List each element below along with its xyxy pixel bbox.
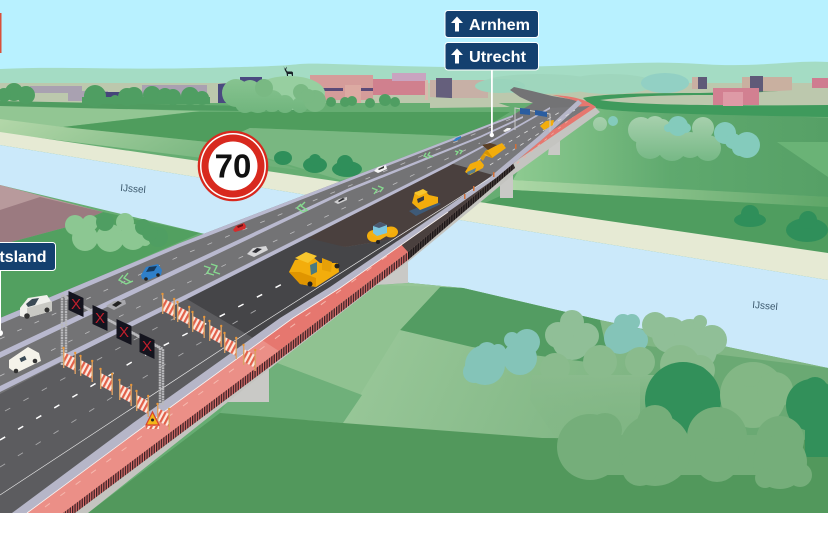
river label left: IJssel — [120, 183, 146, 196]
pale front red shoulder — [27, 340, 285, 513]
red car — [233, 223, 246, 232]
white footer — [0, 513, 828, 552]
left bank meadow — [0, 119, 300, 170]
white car far — [503, 128, 511, 132]
route sign left: tsland — [0, 249, 46, 266]
distant hills — [0, 62, 828, 110]
far lane dashes — [470, 112, 560, 165]
field under bridge light — [277, 285, 440, 395]
main lane dim dashes — [0, 305, 265, 467]
far yellow truck — [540, 120, 554, 130]
hazy far trees — [475, 73, 689, 94]
route sign Utrecht — [445, 42, 538, 70]
route sign Arnhem — [445, 10, 538, 38]
right lower field — [300, 283, 828, 513]
convertible car — [106, 300, 126, 310]
mid trees — [540, 345, 715, 385]
foreground trees — [463, 310, 828, 489]
left dark field — [63, 112, 510, 143]
front barrier row — [62, 347, 170, 430]
left background buildings — [30, 73, 428, 105]
right wedge — [777, 142, 828, 177]
route sign Arnhem: Arnhem — [469, 17, 530, 34]
hill mound — [253, 76, 325, 110]
red label edge — [0, 13, 2, 53]
route sign left — [0, 242, 56, 270]
rear barrier row — [161, 293, 256, 371]
dump truck — [482, 143, 506, 158]
milling machine — [289, 252, 340, 287]
milled brown area — [308, 163, 493, 247]
route pole left — [0, 270, 3, 336]
deer on hill — [253, 66, 325, 110]
bridge deck edge — [75, 107, 600, 513]
top lane dashes — [0, 118, 513, 339]
left mauve land — [0, 185, 200, 320]
bulldozer — [409, 189, 441, 216]
signal 3: X — [119, 324, 129, 341]
silver car — [247, 246, 268, 257]
median barrier — [0, 116, 523, 358]
green chevrons — [119, 150, 462, 284]
construction shoulder — [397, 163, 513, 252]
left tree row — [0, 83, 400, 108]
right dark meadow patch — [400, 287, 610, 365]
speed limit sign 70: 70 — [215, 148, 251, 184]
river IJssel — [0, 145, 828, 368]
route sign Utrecht: Utrecht — [469, 49, 527, 66]
thin edge line — [0, 178, 490, 495]
dark bushes right — [734, 205, 828, 242]
hill trees — [222, 79, 326, 113]
blue car — [141, 264, 162, 281]
lane markings — [0, 110, 575, 495]
signal 1: X — [71, 296, 81, 313]
red fence hatching — [63, 252, 408, 513]
overhead gantry with lane signals — [62, 291, 163, 405]
route pole Arnhem Utrecht — [490, 68, 494, 137]
blend into field — [530, 375, 712, 445]
dark bushes left of road — [274, 151, 362, 177]
blue car far — [453, 136, 461, 141]
road surface — [0, 87, 590, 513]
gantry frame — [62, 295, 163, 405]
inner barrier — [0, 107, 550, 392]
field right of trees — [640, 345, 828, 450]
right dark band — [470, 190, 828, 260]
field under bridge mid — [220, 363, 362, 423]
far left dark strip — [0, 101, 300, 112]
bridge piers — [220, 135, 560, 408]
excavator — [465, 150, 488, 175]
asphalt stripped area — [185, 177, 490, 338]
deer — [284, 66, 293, 76]
far carriageway — [447, 106, 590, 177]
left light field — [0, 106, 200, 127]
far gantry with blue signs — [515, 108, 550, 132]
foreground dark field — [88, 413, 828, 513]
right background buildings — [430, 76, 828, 101]
speed limit sign 70 — [198, 131, 268, 201]
signal 2: X — [95, 310, 105, 327]
sky — [0, 0, 828, 90]
right beige ground — [600, 88, 828, 105]
white edge of shoulder — [27, 212, 448, 513]
bushes right top — [593, 116, 760, 161]
right dark tree — [786, 377, 828, 457]
shoulder dashes — [45, 250, 395, 507]
teal trees — [463, 314, 648, 385]
third lane dim dashes — [5, 310, 190, 411]
front trees — [557, 405, 812, 489]
dark tree — [645, 362, 721, 438]
white car mid — [374, 165, 387, 173]
north barrier — [0, 115, 513, 324]
base field — [0, 103, 828, 513]
background ground — [0, 83, 828, 113]
pink buildings right — [713, 88, 759, 106]
left river trees — [65, 213, 168, 252]
front carriageway — [0, 298, 253, 513]
road roller — [367, 222, 398, 244]
main lane bright dashes — [0, 280, 290, 440]
van white — [20, 295, 52, 319]
right tree — [720, 362, 793, 428]
sage trees — [545, 310, 727, 372]
right far dark curve — [583, 90, 828, 117]
right barrier — [12, 100, 582, 513]
tan ground left of road — [430, 97, 510, 108]
river bank — [0, 132, 828, 280]
dark car mid — [334, 197, 347, 204]
red cycle shoulder — [27, 95, 596, 513]
signal 4: X — [142, 338, 152, 355]
right upper field — [513, 108, 828, 197]
camper white — [9, 347, 41, 373]
left mid field — [217, 128, 475, 180]
workers — [464, 144, 516, 199]
second lane dashes — [0, 143, 480, 376]
dark fence hatching — [408, 163, 515, 260]
warning triangle sign — [146, 412, 159, 429]
river label right: IJssel — [752, 300, 778, 313]
right light bank strip — [513, 180, 828, 207]
